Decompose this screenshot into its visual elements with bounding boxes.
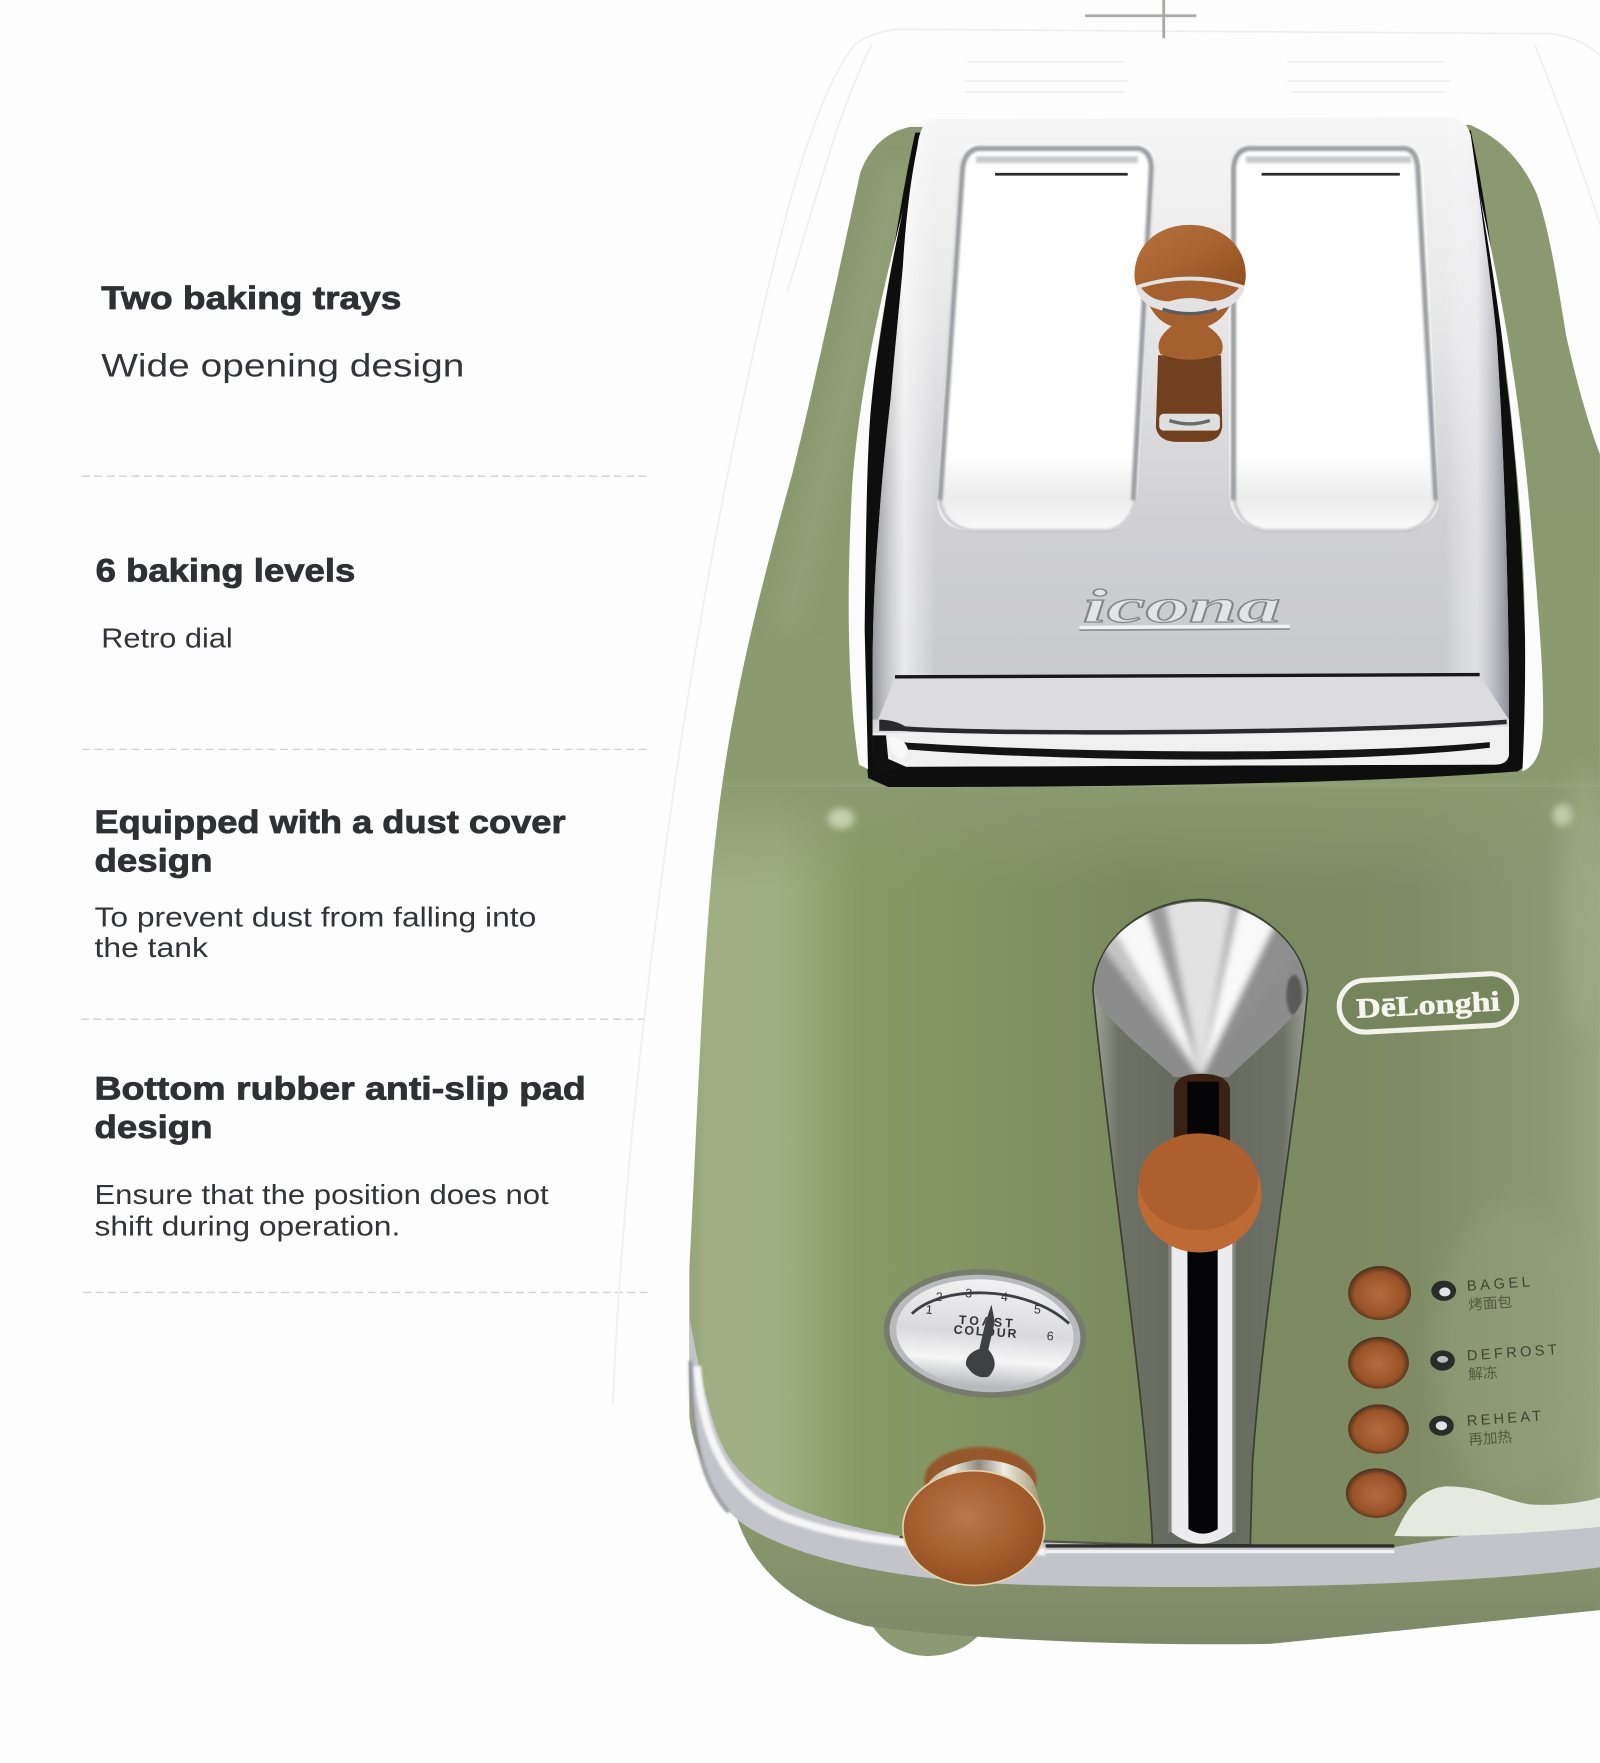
toast colour dial — [880, 1263, 1090, 1404]
body shell — [675, 112, 1600, 1574]
feature: dust cover: To prevent dust from falling into — [94, 901, 536, 932]
toast colour dial: COLOUR — [953, 1323, 1017, 1341]
feature: anti-slip pad — [94, 1070, 586, 1242]
button labels: 再加热 — [1468, 1429, 1513, 1449]
feature: anti-slip pad: shift during operation. — [94, 1211, 400, 1242]
toast colour dial: 4 — [1001, 1290, 1009, 1304]
toast colour dial: 5 — [1034, 1302, 1041, 1317]
feature: anti-slip pad: Bottom rubber anti-slip pad — [94, 1070, 586, 1107]
indicator lights — [1429, 1281, 1456, 1436]
lid logo: icona: icona — [1083, 581, 1281, 633]
lever knob — [1138, 1133, 1262, 1253]
button labels: 烤面包 — [1468, 1294, 1513, 1314]
button labels — [1466, 1274, 1559, 1449]
feature: anti-slip pad: design — [94, 1108, 213, 1145]
button labels: BAGEL — [1466, 1274, 1530, 1295]
feature: dust cover: the tank — [94, 932, 209, 963]
lid front lip — [873, 675, 1509, 776]
feature: 6 baking levels — [96, 551, 355, 654]
chrome lid plate — [873, 117, 1509, 776]
crosshair mark — [1085, 0, 1196, 38]
feature: dust cover: Equipped with a dust cover — [94, 803, 566, 840]
button labels: 解冻 — [1468, 1364, 1498, 1384]
panel: feature list — [81, 279, 649, 1292]
top opening — [849, 130, 1543, 787]
function buttons — [1346, 1266, 1411, 1518]
feature: 6 baking levels: Retro dial — [101, 623, 233, 654]
retouched highlight on band — [1394, 1486, 1600, 1536]
rubber foot — [868, 1619, 987, 1656]
feature: 6 baking levels: 6 baking levels — [96, 551, 355, 588]
toast colour dial: 6 — [1046, 1329, 1054, 1344]
slot: left — [937, 144, 1155, 531]
feature: anti-slip pad: Ensure that the position does not — [94, 1179, 549, 1210]
toast colour dial: TOAST — [958, 1313, 1014, 1331]
toast colour dial: 3 — [965, 1286, 973, 1301]
chrome base band — [689, 1316, 1600, 1587]
browning dial knob — [903, 1447, 1045, 1585]
browning lever track — [1092, 898, 1308, 1544]
lift knob on lid — [1134, 225, 1246, 442]
button labels: DEFROST — [1466, 1342, 1557, 1364]
feature: dust cover: design — [94, 841, 213, 878]
feature: two baking trays — [101, 279, 464, 384]
brand badge: DeLonghi: DēLonghi — [1355, 986, 1501, 1025]
feature: two baking trays: Wide opening design — [101, 347, 464, 384]
slot: right — [1229, 144, 1439, 531]
lever slot — [1168, 1074, 1236, 1544]
ghost outline: erased toaster top — [613, 29, 1600, 1405]
button labels: REHEAT — [1466, 1409, 1542, 1430]
toast colour dial: 2 — [935, 1290, 943, 1304]
lower base — [731, 1495, 1600, 1644]
brand badge: DeLonghi — [1338, 972, 1518, 1033]
feature: dust cover — [94, 803, 566, 963]
feature: two baking trays: Two baking trays — [101, 279, 401, 316]
toast colour dial: 1 — [925, 1303, 933, 1317]
illustration: retro toaster — [613, 0, 1600, 1656]
